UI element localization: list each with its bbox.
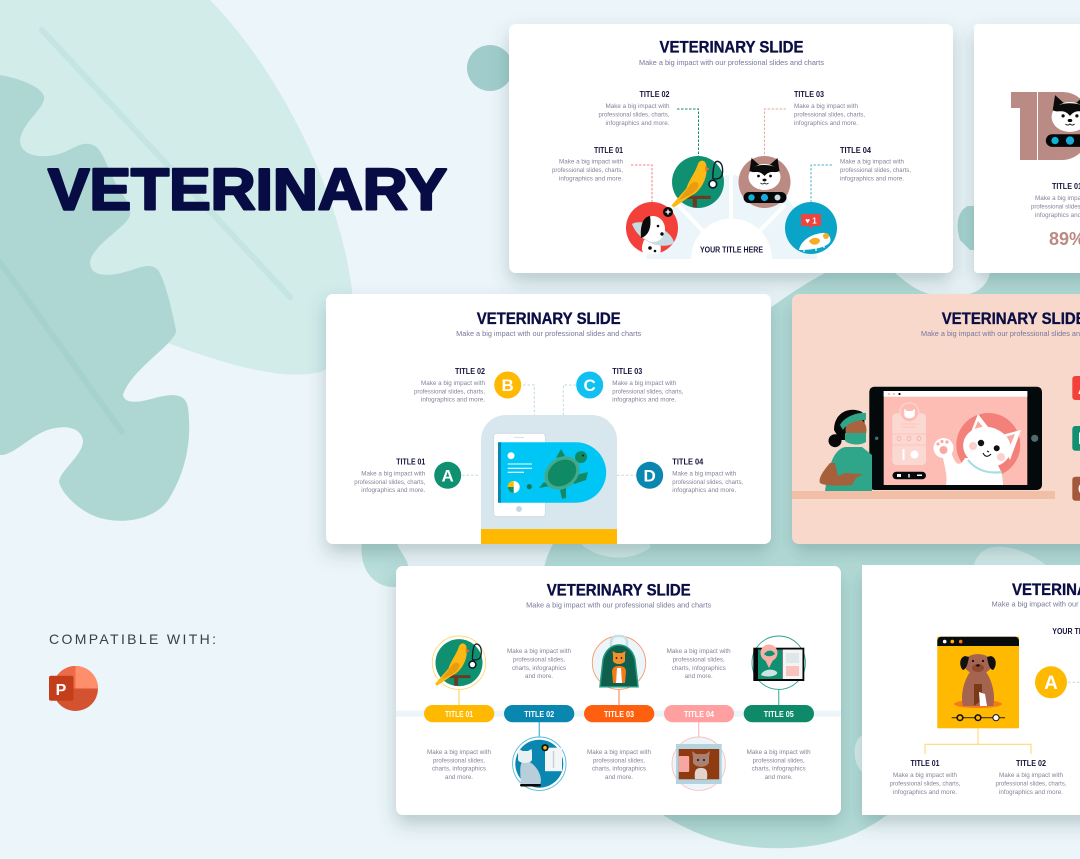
slide 5 text: title 02: professional slides, charts, [996, 780, 1067, 788]
icon: cat on monitor medallion [672, 737, 725, 790]
panel: slide 3 telehealth [792, 294, 1080, 544]
timeline connectors [459, 689, 779, 737]
pill: title 05 [744, 705, 814, 722]
icon: bird in green circle [672, 156, 724, 208]
slide 1 text: title 01: TITLE 01 [594, 146, 623, 155]
slide 1 text: title 02 [598, 90, 670, 127]
timeline text: upper 2: Make a big impact with [507, 648, 571, 655]
slide 2 text: title 03 [612, 367, 684, 404]
slide 2 dashed connectors [462, 385, 636, 475]
decorative circle [467, 45, 513, 91]
pill: title 03 [584, 705, 654, 722]
slide 1 text: title 01: infographics and more. [559, 176, 623, 182]
slide 5 text: title 02: Make a big impact with [999, 772, 1063, 779]
slide 2 text: title 03: TITLE 03 [612, 367, 643, 376]
slide 2 text: title 01: TITLE 01 [396, 458, 426, 466]
timeline text: lower 1: and more. [445, 774, 473, 781]
slide 1 text: title 04: TITLE 04 [840, 146, 872, 155]
letter badge A [434, 462, 461, 489]
pill: title 04 [664, 705, 734, 722]
slide 1 text: title 02: professional slides, charts, [598, 112, 670, 118]
panel: slide top-right number [974, 24, 1080, 273]
slide 1 subtitle: Make a big impact with our professional slides and charts [639, 58, 824, 67]
icon: white cat waving [934, 413, 1021, 485]
org connector [925, 728, 1031, 754]
slide 1 text: title 03: infographics and more. [794, 120, 858, 127]
timeline text: upper 4: professional slides, [673, 656, 725, 664]
slide 1 text: title 04: Make a big impact with [840, 158, 904, 166]
number graphic [1011, 92, 1080, 160]
slide 2 heading: VETERINARY SLIDE [477, 310, 621, 328]
timeline text: upper 2: charts, infographics [512, 665, 566, 672]
slide 1 text: title 04 [840, 146, 911, 182]
phone panel with turtle [481, 415, 617, 544]
slide 2 text: title 04: Make a big impact with [672, 470, 736, 478]
slide 1 text: title 03 [794, 90, 865, 127]
timeline text: lower 3: charts, infographics [592, 766, 646, 772]
slide 2 text: title 02: infographics and more. [421, 396, 485, 404]
icon: cat in carrier [592, 636, 646, 689]
dashed connector [1068, 681, 1080, 683]
icon: bird medallion [432, 636, 486, 689]
slide 2 text: title 02: TITLE 02 [455, 367, 485, 376]
slide 1 text: title 02: TITLE 02 [640, 90, 670, 99]
icon: PowerPoint logo [49, 666, 98, 711]
side tabs [1072, 376, 1080, 501]
pill: title 03: TITLE 03 [604, 709, 634, 719]
letter badge B: B [502, 376, 514, 395]
letter badge D: D [644, 466, 656, 486]
timeline band [396, 711, 841, 717]
icon: hamster in blue circle: ♥ 1 [805, 216, 817, 226]
timeline text: lower 5: charts, infographics [752, 766, 806, 772]
slide 5 text: title 01: infographics and more. [893, 789, 957, 796]
slide 5 text: title 02 [996, 759, 1067, 796]
slide 2 text: title 03: professional slides, charts, [612, 388, 684, 396]
slide 5 text: title 02: infographics and more. [999, 789, 1063, 796]
compatible with label: COMPATIBLE WITH: [49, 631, 216, 647]
background leaf: dark [0, 75, 189, 521]
slide 2 text: title 03: Make a big impact with [612, 380, 676, 387]
icon: turtle [538, 449, 588, 499]
timeline text: lower 5 [747, 749, 811, 781]
tablet [869, 387, 1042, 490]
timeline text: lower 3: Make a big impact with [587, 749, 651, 756]
slide 2 text: title 02: Make a big impact with [421, 380, 485, 387]
letter badge A: A [1044, 673, 1058, 694]
panel: slide 5 dog [862, 565, 1080, 815]
pill: title 05: TITLE 05 [764, 709, 794, 719]
timeline text: upper 4 [667, 648, 731, 680]
timeline text: lower 3: and more. [605, 774, 633, 781]
slide 2 text: title 01 [354, 458, 426, 494]
illustration: nurse [820, 410, 872, 491]
timeline text: lower 3 [587, 749, 651, 781]
timeline text: upper 4: charts, infographics [672, 665, 726, 672]
icon: tablet with pet chat [752, 636, 805, 689]
letter badge C [576, 372, 603, 398]
slide 2 text: title 04: infographics and more. [672, 487, 737, 494]
slide 4 heading: VETERINARY SLIDE [547, 582, 691, 600]
slide 1b text [1031, 182, 1080, 219]
timeline text: lower 1: Make a big impact with [427, 749, 491, 756]
timeline text: lower 5: Make a big impact with [747, 749, 811, 756]
slide 2 text: title 04: professional slides, charts, [672, 479, 744, 486]
table strip [792, 491, 1055, 499]
slide 1 center label: YOUR TITLE HERE [700, 246, 764, 254]
slide 2 text: title 04: TITLE 04 [672, 458, 704, 466]
pill: title 02 [504, 705, 574, 722]
timeline text: upper 4: Make a big impact with [667, 648, 731, 655]
window with dog [937, 637, 1019, 728]
icon: cat x-ray medallion [513, 737, 566, 790]
timeline text: lower 5: and more. [765, 774, 793, 781]
letter badge C: C [584, 376, 596, 395]
slide 1 text: title 01: Make a big impact with [559, 158, 623, 166]
pill: title 01: TITLE 01 [445, 709, 473, 719]
timeline text: lower 1 [427, 749, 491, 781]
pill: title 02: TITLE 02 [524, 709, 554, 719]
slide 5 text: title 02: TITLE 02 [1016, 759, 1046, 768]
timeline text: lower 3: professional slides, [593, 758, 645, 764]
panel: slide 4 timeline [396, 566, 841, 815]
slide 1 text: title 02: infographics and more. [606, 120, 670, 127]
timeline text: lower 1: charts, infographics [432, 766, 486, 772]
pill: title 01 [424, 705, 494, 722]
slide 2 text: title 02 [414, 367, 485, 404]
slide 1 fan base [646, 175, 817, 260]
background leaf: light [0, 0, 353, 375]
slide 5 text: title 01 [890, 759, 961, 796]
slide 1 text: title 02: Make a big impact with [606, 103, 670, 110]
icon: husky [1046, 95, 1080, 147]
slide 5 text: title 01: TITLE 01 [910, 759, 940, 768]
background blobs behind slides [361, 206, 1080, 848]
panel: slide 2 phone [326, 294, 771, 544]
slide 1 text: title 04: infographics and more. [840, 176, 904, 182]
slide 1 text: title 04: professional slides, charts, [840, 167, 911, 174]
slide 2 text: title 01: infographics and more. [361, 487, 426, 494]
icon: PowerPoint logo: P [56, 682, 67, 699]
slide 1 text: title 03: TITLE 03 [794, 90, 824, 99]
icon: dalmatian in red circle [626, 202, 678, 254]
slide 1 text: title 01 [552, 146, 623, 182]
slide 1 dashed connectors [631, 109, 832, 203]
slide 4 subtitle: Make a big impact with our professional slides and charts [526, 600, 712, 610]
timeline text: lower 1: professional slides, [433, 758, 485, 764]
main title: VETERINARY [48, 158, 447, 223]
slide 2 text: title 01: professional slides, charts, [354, 479, 426, 486]
timeline text: upper 4: and more. [685, 673, 713, 680]
slide 2 text: title 02: professional slides, charts, [414, 388, 485, 396]
slide 5 text: title 01: professional slides, charts, [890, 780, 961, 788]
timeline text: upper 2: and more. [525, 673, 553, 680]
slide 1 text: title 03: professional slides, charts, [794, 112, 865, 118]
slide 2 text: title 01: Make a big impact with [361, 470, 425, 478]
letter badge A: A [442, 466, 454, 486]
icon: husky in taupe circle [738, 156, 790, 208]
letter badge A [1035, 666, 1067, 698]
pill: title 04: TITLE 04 [684, 709, 714, 719]
slide 2 subtitle: Make a big impact with our professional slides and charts [456, 329, 642, 338]
slide 1 heading: VETERINARY SLIDE [660, 38, 804, 56]
timeline text: lower 5: professional slides, [753, 758, 805, 764]
slide 2 text: title 04 [672, 458, 744, 494]
slide 2 text: title 03: infographics and more. [612, 396, 677, 404]
letter badge B [494, 372, 521, 398]
icon: hamster in blue circle [785, 202, 837, 254]
slide 1 text: title 01: professional slides, charts, [552, 167, 623, 174]
timeline text: upper 2: professional slides, [513, 656, 565, 664]
letter badge D [636, 462, 663, 489]
panel: slide 1 radial [509, 24, 953, 273]
timeline text: upper 2 [507, 648, 571, 680]
slide 1 text: title 03: Make a big impact with [794, 103, 858, 110]
slide 5 text: title 01: Make a big impact with [893, 772, 957, 779]
